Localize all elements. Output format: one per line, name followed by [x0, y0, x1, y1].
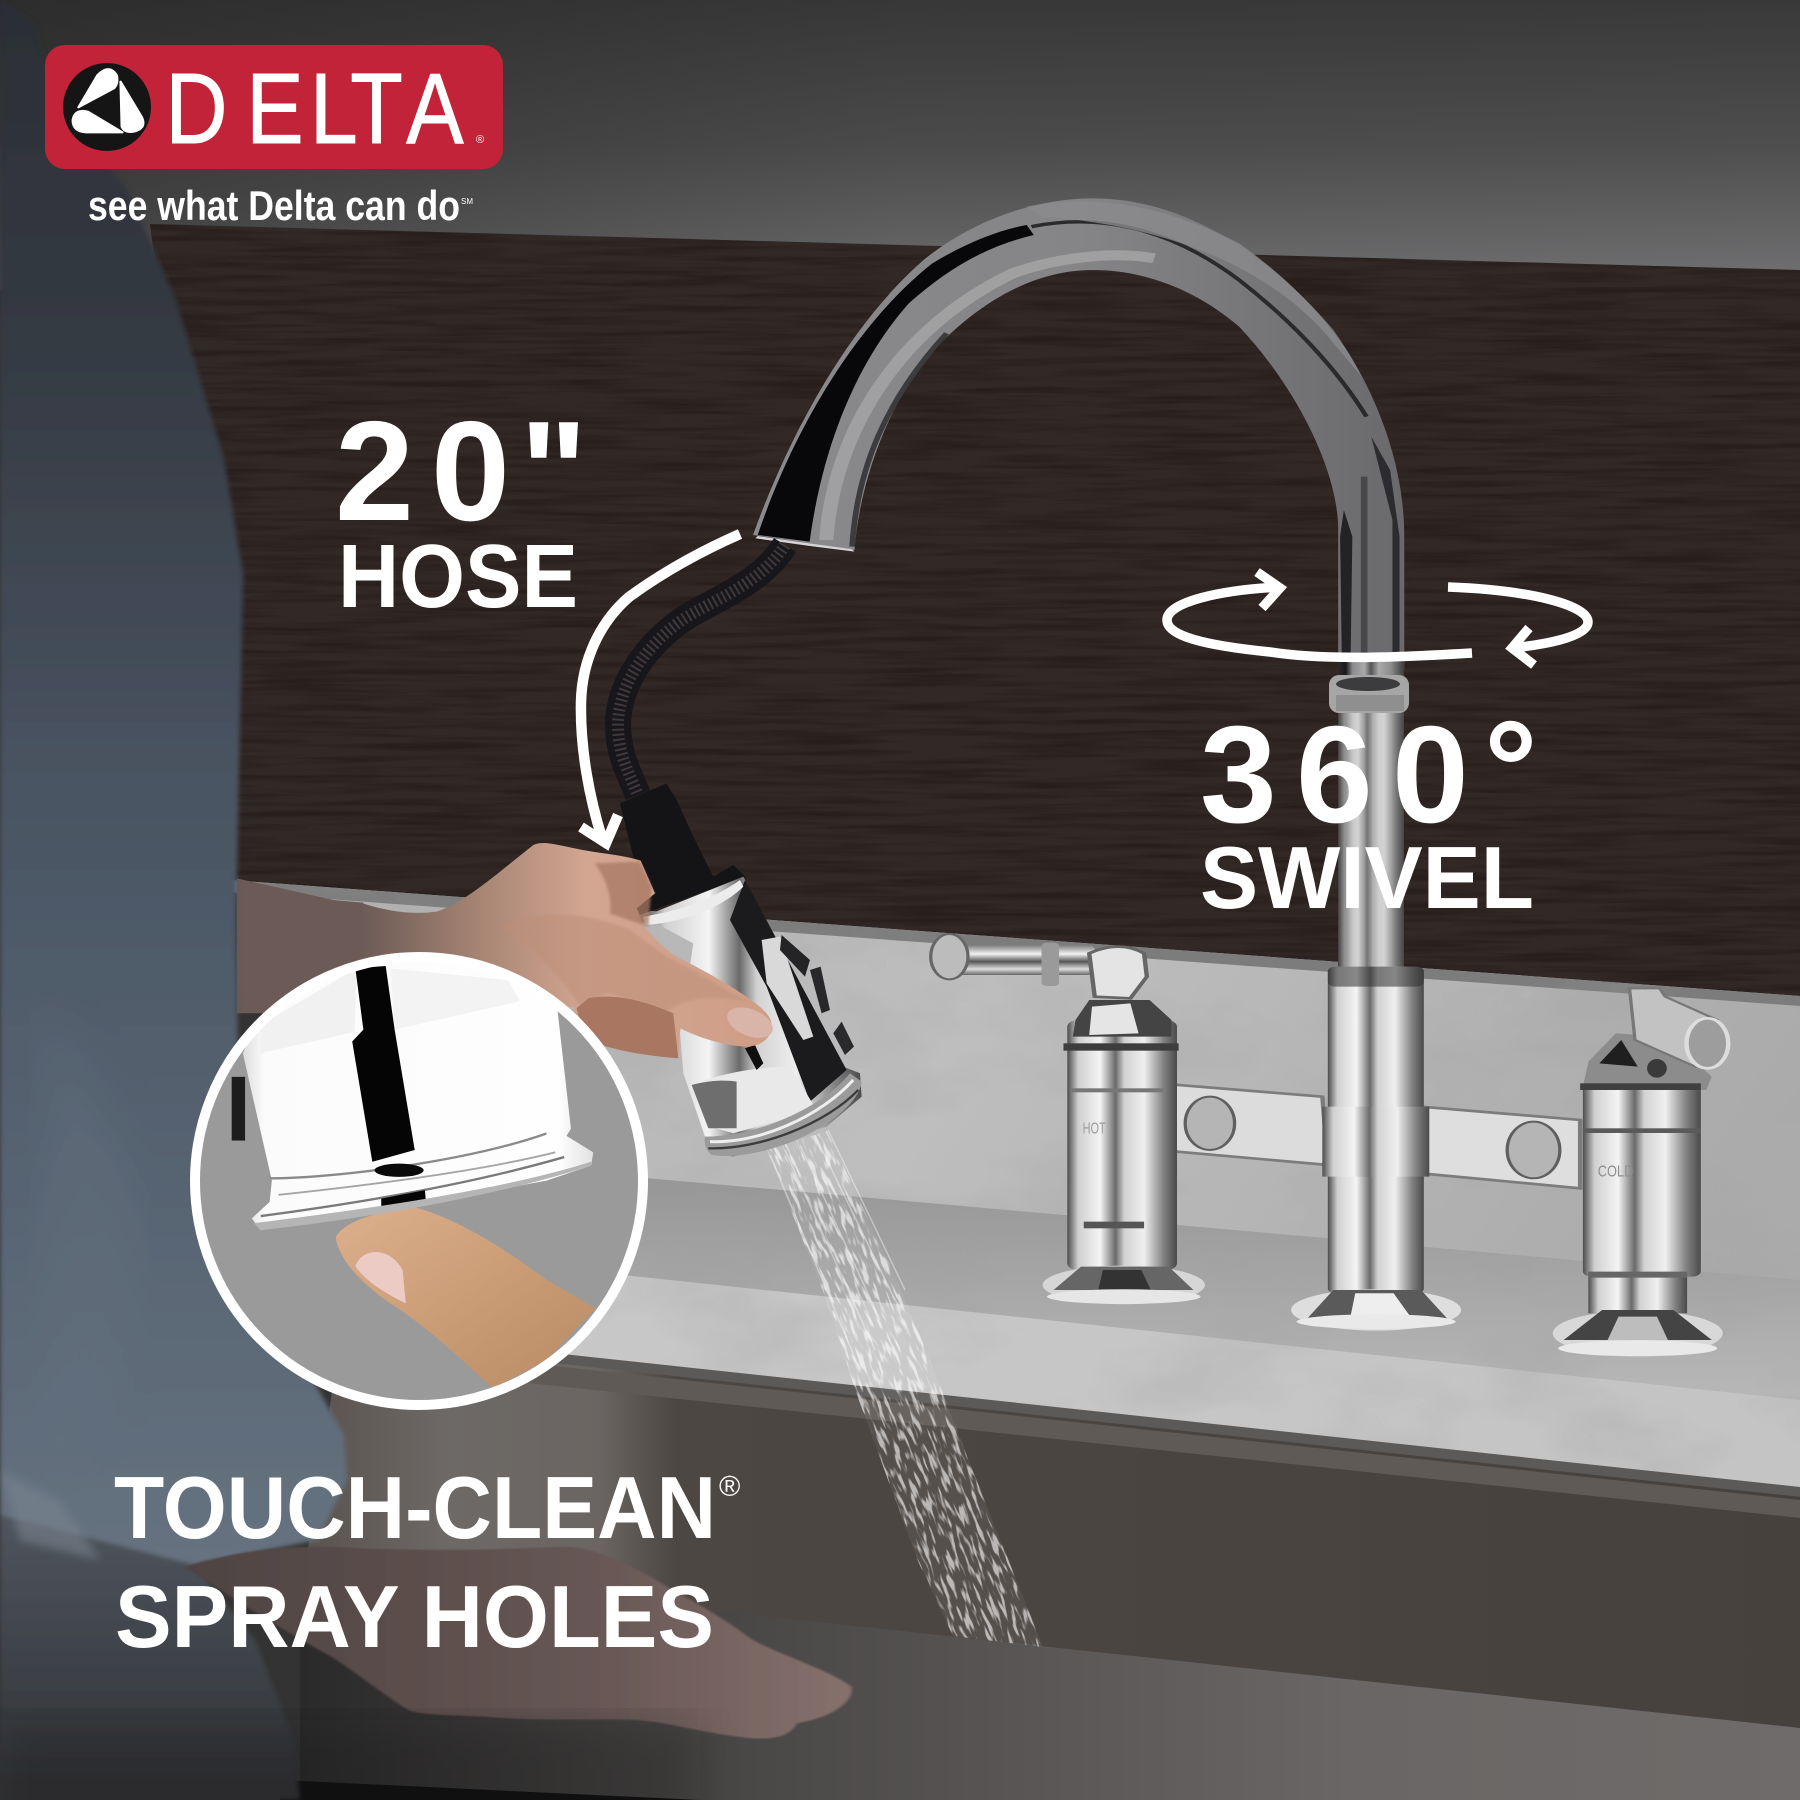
- center riser: [1291, 967, 1461, 1331]
- callout: 20 inch hose: 20": [335, 392, 587, 551]
- bridge right: [1421, 1107, 1580, 1188]
- cold valve: COLD: [1598, 1163, 1633, 1180]
- inset white ring: [195, 957, 643, 1405]
- callout: touch-clean spray holes: [114, 1458, 740, 1666]
- callout: 20 inch hose: HOSE: [338, 527, 578, 627]
- icon: 360 degree swivel arrows: [1167, 572, 1588, 665]
- circular inset: touch-clean aerator and finger: [195, 957, 643, 1405]
- inset background: [196, 958, 642, 1404]
- aerator body: [243, 959, 593, 1230]
- callout: touch-clean spray holes: ®: [719, 1471, 740, 1503]
- mounting screws: [1185, 1097, 1560, 1178]
- logo badge: [45, 45, 503, 169]
- overlay darkening along the bottom left: [0, 1720, 700, 1800]
- hot valve: HOT: [1083, 1120, 1106, 1137]
- registered mark: ®: [476, 134, 484, 146]
- red badge: [45, 45, 503, 169]
- callout: 360 degree swivel: °: [1484, 694, 1538, 843]
- wordmark: DELTA: [165, 53, 464, 164]
- spout and faucet column: [753, 198, 1409, 970]
- pull-down sprayer head: [620, 783, 862, 1157]
- finger: [336, 1207, 596, 1388]
- water streaks under the spray head: [770, 1130, 905, 1370]
- tagline: see what Delta can do: [88, 182, 460, 229]
- icon: delta triangle mark: [63, 63, 151, 151]
- callout: 20 inch hose: [335, 392, 587, 627]
- callout: touch-clean spray holes: TOUCH-CLEAN: [114, 1458, 716, 1557]
- cold valve: [1553, 988, 1728, 1356]
- blurred lower hand: [185, 1547, 852, 1739]
- hand holding sprayer: [360, 843, 777, 1058]
- callout: 360 degree swivel: 360: [1200, 698, 1469, 852]
- callout: 360 degree swivel: [1200, 694, 1538, 927]
- water spray: [767, 1131, 1042, 1646]
- arrow: hose length: [581, 534, 740, 843]
- bridge faucet base, valves and handles: [931, 934, 1728, 1356]
- hose: [618, 545, 785, 795]
- bridge left: [1158, 1083, 1328, 1165]
- tagline: SM: [461, 197, 473, 206]
- callout: touch-clean spray holes: SPRAY HOLES: [115, 1567, 714, 1666]
- callout: 360 degree swivel: SWIVEL: [1200, 828, 1534, 927]
- hot valve: [931, 934, 1205, 1304]
- person shirt: [0, 0, 347, 1800]
- upper arm behind the shirt: [237, 878, 363, 1013]
